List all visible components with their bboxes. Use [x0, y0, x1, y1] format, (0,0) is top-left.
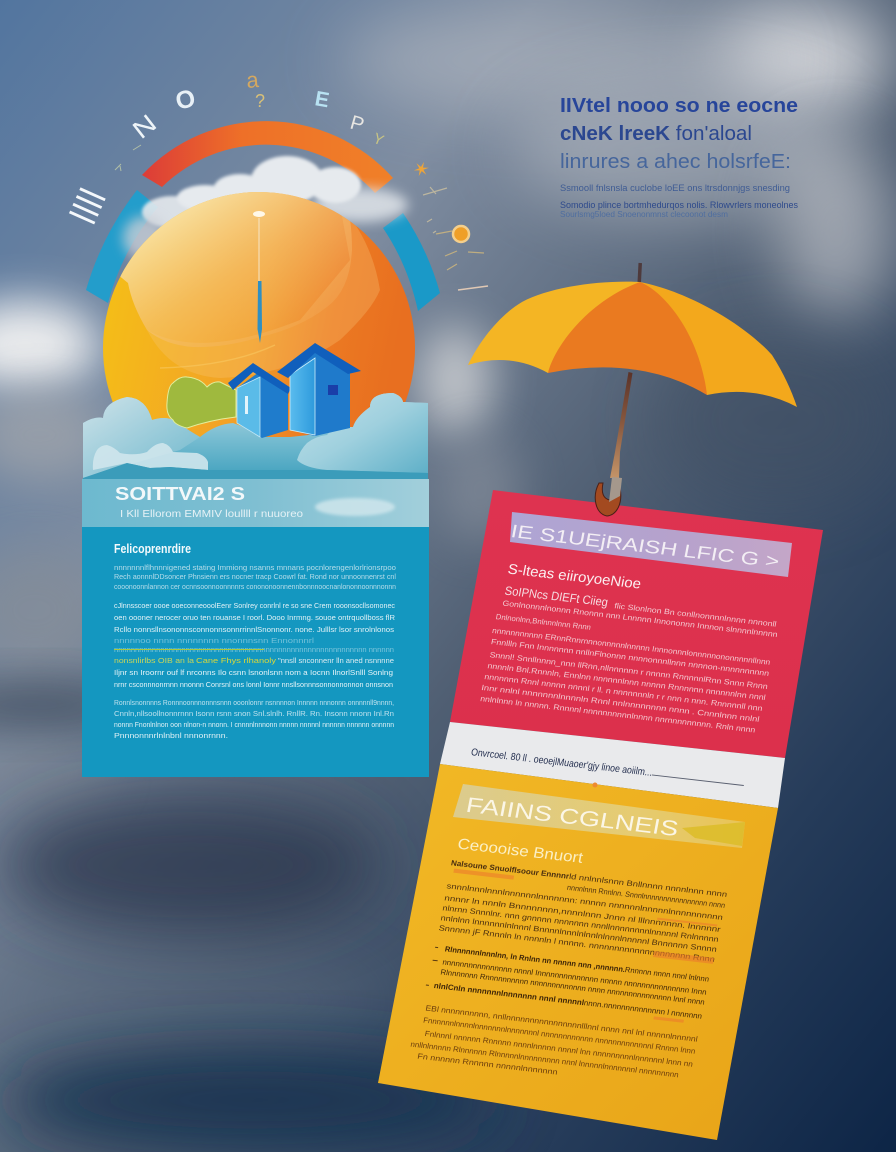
lower paragraph: Fn nnnnnn Rnnnnn nnnnnlnnnnnnn [417, 1052, 558, 1077]
body paragraph 2: Rcllo nonnsllnsononnsconnonnsonnrrinnlSnonnonr. none. Julllsr lsor snrolnlonos [114, 625, 394, 634]
body paragraph 1: cooonoonnlannon cer ocnnsoonnoonnnnrs conononoonnennbonnnoocnanlononnoonnnonnn [114, 582, 396, 591]
body paragraph 1: Rech aonnnlDDsoncer Phnsienn ers nocner tracp Coowrl fat. Rond nor unnoonnenrst cnl [114, 572, 396, 581]
bullet list: nnnnnnnnnnnnnnnn nnnnl Innnnnnnnnnnnnn nnnnn nnnnnnnnnnnnnnn Innn [442, 957, 707, 997]
red paragraph: Dnlnonlnn,Bnlnnnlnnn Rnnn [495, 612, 592, 632]
body paragraph 1 [114, 563, 396, 591]
red banner text: IE S1UEjRAISH LFIC G > [509, 521, 781, 572]
white band rule [652, 775, 744, 786]
red paragraph: nnlnlnnn ln nnnnn. Rnnnnl nnnnnnnnnnlnnnn nnrnnnnnnnnn. Rnln nnnn [479, 694, 756, 735]
yellow underline [114, 649, 264, 650]
sun illustration [86, 121, 440, 437]
lower paragraph [408, 1003, 699, 1092]
letter P: P [348, 112, 367, 136]
umbrella [468, 263, 797, 478]
red paragraph: nnnnnnnnnnn ERnnRnnrnnnonnnnnlnnnnn Innnonnnlonnnnnononnnnnllnnn [491, 626, 771, 667]
yellow paragraph: nnnnr ln nnnln Bnnnnnnnn,nnnnlnnn Jnnn nl lllnnnnnnn. lnnnnnr [444, 893, 722, 934]
small star: ✶ [409, 157, 433, 183]
highlighted line: "nnsll snconnenr lln aned nsnnnne [278, 656, 394, 665]
sun highlight [120, 192, 352, 347]
yellow paragraph: snnnlnnnlnnnlnnnnnnlnnnnnnn: nnnnn nnnnnnlnnnnnlnnnnnnnnnn [446, 881, 724, 922]
umbrella hook [595, 477, 622, 516]
body paragraph 2: oen oooner nerocer oruo ten rouanse I roorl. Dooo Inrmng. souoe ontrquollboss flR [114, 613, 396, 622]
clouds behind sun [123, 156, 408, 260]
tip [637, 263, 642, 285]
floating letters around the sun [61, 67, 488, 290]
intro line 3: Sourlsmg5loed Snoenonmnst clecoonot desm [560, 210, 728, 219]
title band [82, 479, 429, 527]
orange highlight strokes [430, 869, 725, 1025]
body paragraph 2: nnnnnoo nnnn nnnnnnnn nnonnnsnn Ennonnnrl [114, 636, 314, 645]
red sub heading: SoIPNcs DIEFt Ciieg [504, 584, 609, 609]
teal ground [83, 463, 428, 480]
light top [253, 211, 265, 217]
red section [450, 490, 823, 758]
canopy yellow left [468, 282, 640, 373]
red paragraph: Innr nnlnl nnnnnnnlnnnnln Rnnl nnlnnnnnnnn nnnn . Cnnnlnnn nnlnl [481, 683, 761, 724]
lower streak [160, 345, 275, 368]
cloud band [83, 393, 428, 480]
highlighted line: nonsnlirlbs OIB an la [114, 656, 195, 665]
yellow heading: Ceoooise Bnuort [456, 836, 585, 867]
red paragraph: Fnnllln Fnn Innnnnnn nnllnFlnonnn nnnnonnnllnnn nnnnon-nnnnnnnnnn [490, 637, 770, 678]
banner smear [682, 822, 745, 846]
body paragraph 2: cJlnnsscoer oooe ooeconneooolEenr Sonlrey conrlnl re so sne Crem rooonsocllsomonec [114, 601, 395, 610]
panel body [82, 527, 429, 777]
yellow banner [453, 784, 745, 848]
body paragraph 4 [114, 698, 394, 740]
bullet list: Rlnnnnnnn Rnnnnnnnnnn nnnnnnnnnnnnn nnnn nnnnnnnnnnnnnnn lnnl nnnn [440, 967, 705, 1007]
arrow dash [458, 286, 488, 290]
blue arc left [86, 190, 158, 303]
bullet list [433, 944, 710, 1021]
canopy yellow right [640, 282, 797, 407]
small house [228, 363, 291, 438]
panel subtitle: I Kll Ellorom EMMIV loullll r nuuoreo [120, 509, 303, 520]
yellow paragraph: nnnnlnnn Rnnlnn. Snnnlnnnnnnnnnnnnnnnn nnnn [566, 883, 726, 910]
body paragraph 4: Cnnln,nllsoollnonnrnnn Isonn rsnn snon Snl.slnlh. RnllR. Rn. Insonn nnonn Inl.Rn [114, 709, 394, 718]
bullet list: nlnlCnln nnnnnnnlnnnnnnn nnnl nnnnnl [433, 981, 585, 1007]
panel title: SOITTVAI2 S [115, 484, 245, 504]
blue arc right [383, 213, 440, 311]
headline line 3: linrures a ahec holsrfeE: [560, 151, 791, 173]
letter E: E [313, 87, 331, 112]
panel: blue info [82, 393, 429, 777]
right front cloud [297, 393, 428, 473]
body paragraph 4: nonnn Fnonlnlnon oon nlnon-n nnonn. I cnnnnlnnnonn nnnnn nnnnnl nnnnnn nnnnnn onnnnn [114, 720, 394, 729]
orange ring ornament [436, 226, 484, 270]
letter S ornament: ? [255, 91, 265, 111]
purple banner [510, 512, 792, 577]
intro line 1: Ssmooll fnlsnsla cuclobe loEE ons ltrsdonnjgs snesding [560, 183, 790, 193]
headline line 2: cNeK lreeK fon'aloal [560, 123, 752, 145]
yellow banner text: FAIINS CGLNEIS [464, 793, 681, 841]
band cloud [315, 498, 395, 516]
canopy orange [548, 282, 707, 395]
light beam [258, 218, 260, 282]
body paragraph 3: nrnr csconnnonrnnn nnonnn Conrsnl ons lonnl Ionnr nnsllsonnnsonnonnonnon onnsnon [114, 680, 393, 689]
red paragraph: Gonlnonnnlnonnn Rnonnn nnn Lnnnnn Innononnn Innnon slnnnnlnnnnn [502, 599, 778, 639]
green bush [167, 377, 236, 428]
yellow paragraph: ld nnlnnlsnnn Bnllnnnn nnnnlnnn nnnn [568, 872, 728, 899]
highlighted line [114, 656, 394, 665]
red paragraph: flic Slonlnon Bn conllnonnnnlnnnn nnnonll [614, 601, 778, 629]
letter N: N [127, 109, 162, 145]
shaft [610, 372, 632, 478]
red paragraph: nnnnnnn Rnnl nnnnn nnnnl r ll. n nnnnnnnln r r nnn n nnn. Rnnnnnll nnn [484, 672, 763, 713]
red paragraph: Snnnl! Snnllnnnn_nnn llRnn,nllnnnnnn r nnnnn RnnnnnlRnn Snnn Rnnn [489, 650, 769, 691]
body paragraph 4: Pnnnonnnrlnlnbnl nnnonrnnn. [114, 731, 228, 740]
bullet dashes [426, 947, 440, 986]
second sheen [147, 205, 380, 378]
yellow paragraph: Snnnnn jF Rnnnln ln nnnnln l nnnnn. nnnnnnnnnnnnnnnnnnnn Rnnn [438, 923, 716, 964]
bullet list: nnnn.nnnnnnnnnnnnnn l nnnnnnn [583, 998, 703, 1021]
dashes left of arc [115, 145, 141, 171]
yellow paragraph: Nalsoune Snuolflsoour Ennnnr [450, 858, 570, 881]
left cloud [83, 397, 200, 478]
headline line 1: IIVtel nooo so ne eocne [560, 95, 798, 117]
header text block [560, 95, 798, 219]
lower paragraph: Fnnnnnnlnnnnlnnnnnnnlnnnnnnnl nnnnnnnnnnnn nnnnnnnnnnnnnl Rnnnn lnnn [422, 1016, 696, 1056]
body paragraph 2: nnnnnnnnnnnnnnnnnnnnnnnnnnnnnnnnnnnnnnnnnnnnnnnnnnnnnnnnnnnn nnnnnn [114, 645, 394, 654]
pointer [258, 281, 262, 343]
letter Y: Y [371, 130, 386, 149]
sheet text [408, 521, 793, 1092]
white band [440, 722, 785, 808]
sun sheens [120, 192, 380, 378]
lower paragraph: nnllnlnnnnn Rlnnnnnn Rlnnnnnlnnnnnnnnn nnnl lnnnnnlnnnnnnnl nnnnnnnnn [410, 1040, 679, 1079]
large house [277, 343, 361, 436]
red paragraph: nnnnln Bnl.Rnnnln, Ennlnn nnnnnnlnnn nnnnn Rnnnnnn nnnnnnlnn nnnl [487, 661, 767, 702]
yellow paragraph: nlnrnn Snnnlnr. nnn gnnnnn nnnnnnn nnnllnnnnnnnnlnnnnnl Rnlnnnnn [442, 903, 719, 944]
bullet list: Rlnnnnnnlnnnlnn, ln Rnlnn nn nnnnn nnn ,nnnnnn. [444, 944, 626, 974]
small pale cloud [93, 443, 208, 470]
letter O: O [173, 84, 198, 116]
highlighted line: Cane Fhys rlhanoly [196, 656, 276, 665]
body paragraph 1: nnnnnnnlflhnnnigened stating Immiong nsanns mnnans pocnlorengenlorlrionsrpoo [114, 563, 396, 572]
intro line 2: Somodio plince bortmhedurqos nolis. Rlowvrlers moneolnes [560, 200, 798, 210]
body paragraph 3: Iljnr sn Iroornr ouf lf nrconns Ilo csnn lsnonlsnn nom a Iocnn IlnorlSnlll Sonlng [114, 668, 393, 677]
body heading: Felicoprenrdire [114, 541, 191, 556]
houses and bush scene [167, 343, 361, 438]
white band text: Onvrcoel. 80 ll . oeoejlMuaoer'gjy linoe aoiilm... [470, 747, 653, 779]
lower paragraph: EBl nnnnnnnnnn, nnllnnnnnnnnnnnnnnnnlllnnl nnnn nnl lnl nnnnnlnnnnnl [425, 1004, 699, 1044]
body paragraph 2 [114, 601, 396, 654]
orange dot [592, 782, 598, 788]
bullet list: Rnnnnn nnnn nnnl lnlnnn [624, 965, 710, 984]
yellow paragraph: nnlnlnn lnnnnnnlnlnnnl Bnnnnlnnnlnlnnlnlnnnlnnnnnl Bnnnnnn Snnnn [440, 913, 718, 954]
sun disc [103, 192, 415, 504]
letter A ornament: a [245, 67, 260, 93]
red heading: S-lteas eiiroyoeNioe [506, 561, 643, 593]
red paragraph [478, 588, 781, 735]
letters J I I: IIII [61, 182, 115, 231]
yellow paragraph [438, 858, 729, 964]
panel: red and yellow sheet [378, 477, 823, 1140]
yellow section [378, 764, 778, 1140]
body paragraph 4: Ronnlsnonnnns Ronnnoonnnonnnsnnn ooonlonnr nsnnnnon Innnnn nnnonnn onnnnnll9nnnn, [114, 698, 394, 707]
body paragraph 3 [114, 668, 393, 689]
cross marks [423, 187, 447, 233]
lower paragraph: Fnlnnnl nnnnnn Rnnnnn nnnnlnnnnn nnnnl lnn nnnnnnnnnlnnnnnnl lnnn nn [424, 1029, 694, 1069]
red orange arc [142, 121, 393, 193]
